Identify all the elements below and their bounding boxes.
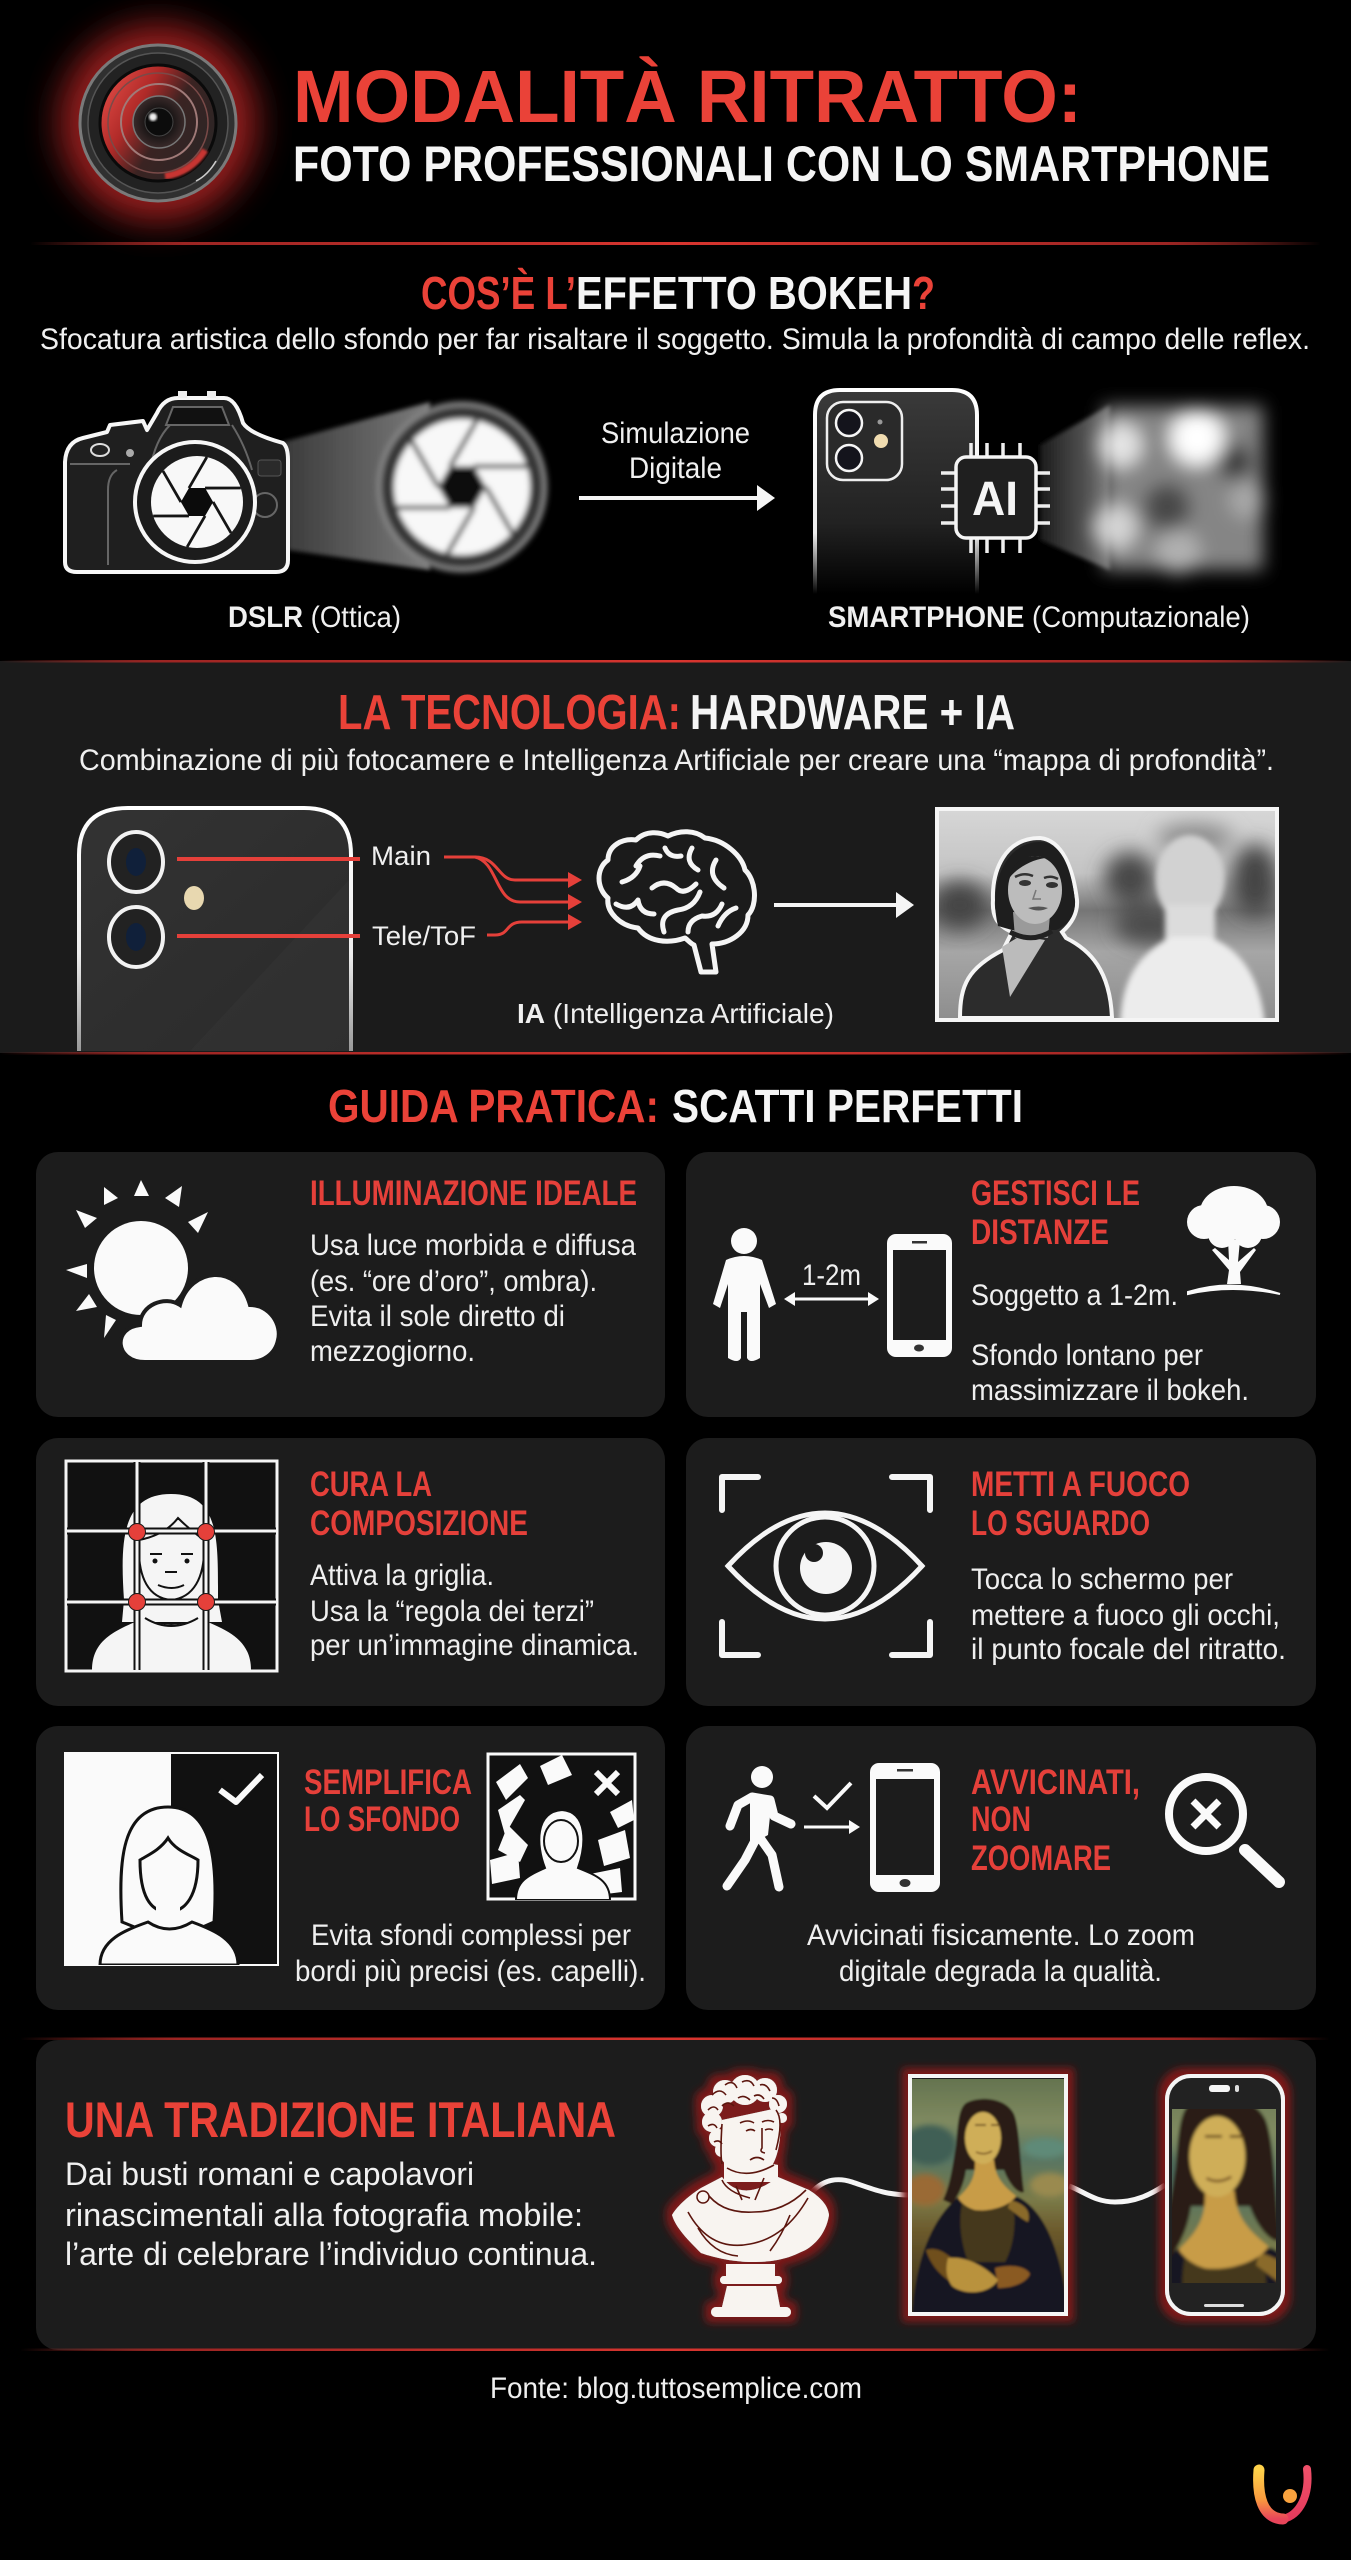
card text: [807, 1919, 1195, 1988]
heading: LA TECNOLOGIA:: [338, 686, 681, 740]
description: Sfocatura artistica dello sfondo per far risaltare il soggetto. Simula la profondità di campo delle reflex.: [40, 323, 1310, 356]
card title: GESTISCI LE: [971, 1174, 1140, 1213]
icon: camera lens: [60, 25, 256, 221]
icon: rule of thirds portrait: [66, 1461, 277, 1671]
heading: UNA TRADIZIONE ITALIANA: [65, 2092, 616, 2148]
image: blurred bokeh: [1093, 406, 1265, 574]
card text: digitale degrada la qualità.: [839, 1955, 1162, 1988]
card title: COMPOSIZIONE: [310, 1504, 528, 1543]
card title: NON: [971, 1800, 1031, 1839]
portrait photo: [932, 809, 1279, 1025]
icon: phone: [887, 1234, 952, 1357]
description: Dai busti romani e capolavori: [65, 2156, 474, 2192]
card text: Soggetto a 1-2m.: [971, 1279, 1178, 1312]
card text: bordi più precisi (es. capelli).: [295, 1955, 646, 1988]
icon: roman bust: [672, 2075, 829, 2317]
icon: focus eye: [722, 1477, 930, 1655]
card: distanze: [686, 1152, 1316, 1417]
beam: dslr: [283, 402, 430, 570]
icon: ai chip: [941, 443, 1050, 553]
beam: bokeh: [1040, 405, 1110, 570]
card text: [971, 1563, 1286, 1666]
heading: practical guide: [328, 1080, 1023, 1132]
distance arrow: [784, 1259, 879, 1306]
card text: Sfondo lontano per: [971, 1339, 1203, 1372]
white arrow: [774, 892, 914, 918]
icon: logo: [1259, 2469, 1308, 2519]
icon: dslr camera: [65, 391, 288, 572]
icon: magnifier with x: [1169, 1777, 1279, 1882]
card: sfondo: [36, 1726, 665, 2010]
icon: ai chip: AI: [972, 473, 1018, 526]
card title: METTI A FUOCO: [971, 1465, 1190, 1504]
phone back: [79, 808, 351, 1051]
card text: Attiva la griglia.: [310, 1559, 494, 1592]
connector lines: [177, 857, 360, 938]
heading: EFFETTO BOKEH: [576, 267, 912, 319]
card text: [310, 1229, 636, 1368]
description: Combinazione di più fotocamere e Intelligenza Artificiale per creare una “mappa di profondità”.: [79, 744, 1274, 777]
card text: massimizzare il bokeh.: [971, 1374, 1249, 1407]
simulation label: Digitale: [629, 452, 722, 485]
source: Fonte: blog.tuttosemplice.com: [490, 2372, 862, 2405]
card title: LO SGUARDO: [971, 1504, 1150, 1543]
card title: [971, 1465, 1190, 1543]
card text: (es. “ore d’oro”, ombra).: [310, 1265, 597, 1298]
card text: mezzogiorno.: [310, 1335, 475, 1368]
label: main: Main: [371, 841, 431, 871]
label: tele: Tele/ToF: [372, 921, 476, 951]
icon: blurred aperture: [379, 404, 545, 570]
description: [65, 2156, 597, 2272]
card text: Tocca lo schermo per: [971, 1563, 1233, 1596]
card title: ZOOMARE: [971, 1839, 1111, 1878]
card text: Usa la “regola dei terzi”: [310, 1595, 594, 1628]
card text: [310, 1559, 639, 1662]
section: bokeh: [40, 267, 1310, 634]
card text: mettere a fuoco gli occhi,: [971, 1599, 1280, 1632]
card text: [295, 1919, 646, 1988]
card title: SEMPLIFICA: [304, 1763, 472, 1802]
icon: simple background portrait: [65, 1753, 278, 1965]
title: MODALITÀ RITRATTO:: [293, 55, 1082, 138]
card title: [971, 1174, 1140, 1252]
distance arrow: 1-2m: [802, 1259, 861, 1292]
icon: sun and cloud: [66, 1180, 279, 1362]
icon: complex background portrait: [488, 1754, 635, 1900]
heading: [421, 267, 935, 319]
panel: tradizione italiana: [26, 2038, 1324, 2351]
card title: DISTANZE: [971, 1213, 1109, 1252]
card title: ILLUMINAZIONE IDEALE: [310, 1174, 637, 1213]
card: zoom: [686, 1726, 1316, 2010]
header: [60, 25, 1270, 221]
connector waves: [812, 2180, 1165, 2202]
heading: practical guide: SCATTI PERFETTI: [672, 1080, 1023, 1132]
icon: phone with mona lisa: [1152, 2063, 1296, 2327]
section: technology: [0, 660, 1351, 1054]
heading: HARDWARE + IA: [690, 686, 1015, 740]
heading: COS’È L’: [421, 267, 576, 319]
card: composizione: [36, 1438, 665, 1706]
title: [293, 55, 1270, 192]
arrow: [579, 485, 775, 511]
card text: per un’immagine dinamica.: [310, 1629, 639, 1662]
card title: [304, 1763, 472, 1839]
icon: tree: [1187, 1186, 1280, 1294]
label: smartphone: SMARTPHONE (Computazionale): [828, 601, 1250, 634]
card title: [971, 1763, 1140, 1878]
simulation label: [601, 417, 750, 485]
icon: person: [713, 1228, 776, 1361]
icon: walking person: [727, 1766, 791, 1887]
card: sguardo: [686, 1438, 1316, 1706]
heading: practical guide: GUIDA PRATICA:: [328, 1080, 659, 1132]
icon: smartphone: [815, 390, 977, 594]
card: illuminazione: [36, 1152, 665, 1417]
card title: CURA LA: [310, 1465, 432, 1504]
heading: [338, 686, 1015, 740]
icon: phone: [870, 1763, 940, 1892]
check and arrow: [804, 1783, 860, 1834]
card title: AVVICINATI,: [971, 1763, 1140, 1802]
label: ia: IA (Intelligenza Artificiale): [517, 998, 834, 1029]
image: mona lisa frame: [900, 2070, 1080, 2330]
card text: Avvicinati fisicamente. Lo zoom: [807, 1919, 1195, 1952]
simulation label: Simulazione: [601, 417, 750, 450]
red arrows: [444, 857, 582, 935]
card text: Evita il sole diretto di: [310, 1300, 565, 1333]
heading: ?: [912, 267, 935, 319]
card text: [971, 1279, 1249, 1407]
card title: [310, 1465, 528, 1543]
label: dslr: DSLR (Ottica): [228, 601, 401, 634]
card text: il punto focale del ritratto.: [971, 1633, 1286, 1666]
card title: LO SFONDO: [304, 1800, 460, 1839]
description: l’arte di celebrare l’individuo continua.: [65, 2236, 597, 2272]
icon: brain: [599, 832, 754, 972]
description: rinascimentali alla fotografia mobile:: [65, 2197, 583, 2233]
card text: Evita sfondi complessi per: [311, 1919, 631, 1952]
card text: Usa luce morbida e diffusa: [310, 1229, 636, 1262]
